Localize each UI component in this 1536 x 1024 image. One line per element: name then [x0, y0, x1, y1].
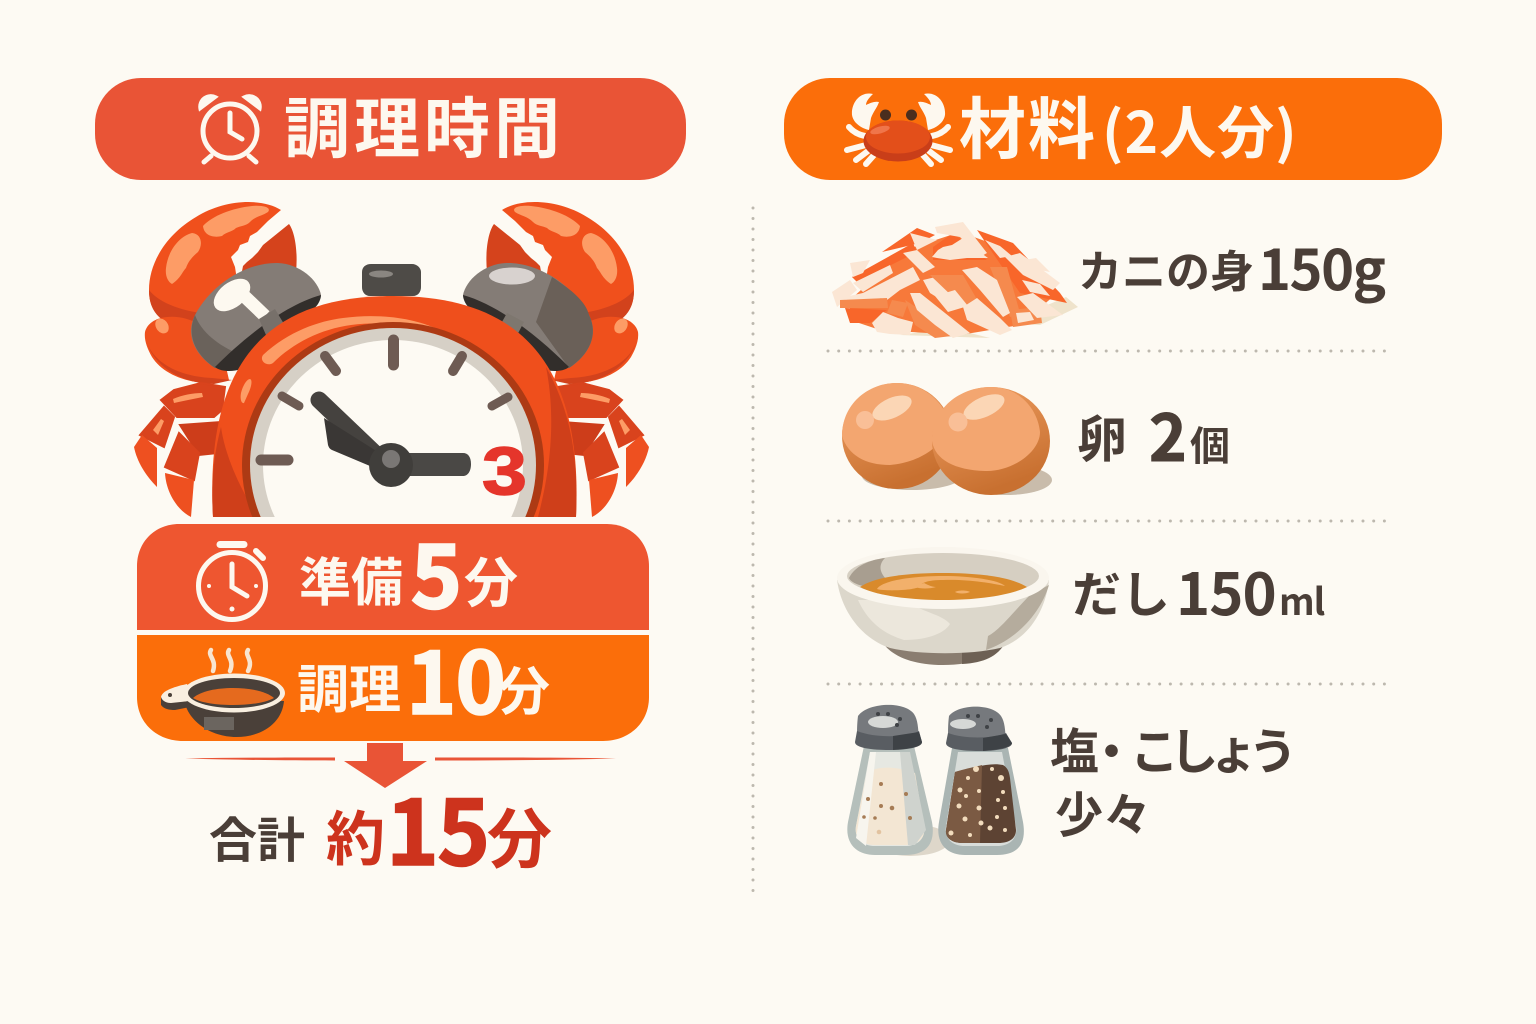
label: eggs [1077, 388, 1230, 480]
icon: crab meat pile [832, 222, 1078, 338]
label: dashi: ml [1279, 572, 1325, 626]
icon: two eggs [842, 383, 1052, 495]
icon: salt shaker [847, 705, 950, 856]
label: dashi [1072, 548, 1325, 632]
total time: 約 [326, 792, 385, 877]
clock ticks [261, 340, 508, 460]
label: salt and pepper: 塩 [1050, 713, 1099, 784]
icon: crab [847, 94, 950, 164]
time panel: preparation: 5 [411, 508, 462, 633]
label: eggs: 卵 [1077, 400, 1127, 472]
heading: ingredients [784, 76, 1442, 180]
divider: vertical dots [752, 208, 754, 895]
time panel: preparation: 分 [464, 539, 518, 618]
clock face [242, 322, 544, 517]
label: crab meat [1078, 226, 1386, 307]
ingredient: dashi [837, 547, 1325, 665]
label: dashi: 150 [1176, 548, 1276, 632]
time panel: preparation [137, 508, 649, 633]
label: salt and pepper: ・ [1087, 713, 1136, 784]
icon: steaming pan [161, 650, 285, 737]
crab claw and legs, right [486, 202, 649, 517]
ingredient: salt and pepper [847, 705, 1290, 856]
clock hands [319, 400, 471, 487]
arrow: total [185, 743, 616, 788]
label: salt and pepper: 少々 [1055, 776, 1151, 846]
top button [362, 264, 421, 296]
icon: stopwatch [198, 544, 266, 620]
left bell [191, 263, 321, 371]
total time: 15 [386, 761, 488, 891]
lower leg [180, 422, 222, 455]
clock body [212, 296, 577, 517]
ingredient: eggs [842, 383, 1230, 495]
icon: bowl of dashi [837, 547, 1049, 665]
label: dashi: だし [1072, 556, 1170, 627]
heading: ingredients: (2人分) [1102, 88, 1298, 170]
clock numeral 3: 3 [482, 433, 527, 509]
heading: cooking time [95, 76, 686, 180]
label: eggs: 個 [1190, 414, 1230, 472]
divider: row dots [828, 351, 1395, 684]
icon: pepper shaker [938, 707, 1024, 855]
time panel: cooking: 分 [498, 650, 550, 725]
heading: ingredients: 材料 [959, 76, 1097, 173]
label: crab meat: カニの身 [1078, 236, 1254, 300]
label: crab meat: 150g [1258, 226, 1386, 307]
right bell [463, 263, 593, 371]
ingredient: crab meat [832, 222, 1386, 338]
label: salt and pepper [1050, 713, 1290, 846]
total time: 合計 [209, 801, 305, 871]
infographic canvas [95, 78, 1442, 892]
heading: cooking time: 調理時間 [284, 76, 564, 172]
time panel: cooking: 10 [406, 614, 504, 739]
total time: 分 [487, 787, 552, 881]
illustration: crab alarm clock [134, 202, 649, 608]
time panel: cooking: 調理 [297, 648, 401, 723]
upper leg [161, 383, 225, 417]
icon: alarm clock [200, 96, 260, 162]
time panel: preparation: 準備 [299, 541, 403, 616]
time panel: cooking [137, 614, 649, 741]
total time [209, 761, 552, 891]
crab claw and legs, left [134, 202, 297, 517]
label: salt and pepper: こしょう [1130, 713, 1290, 784]
label: eggs: 2 [1149, 388, 1187, 480]
